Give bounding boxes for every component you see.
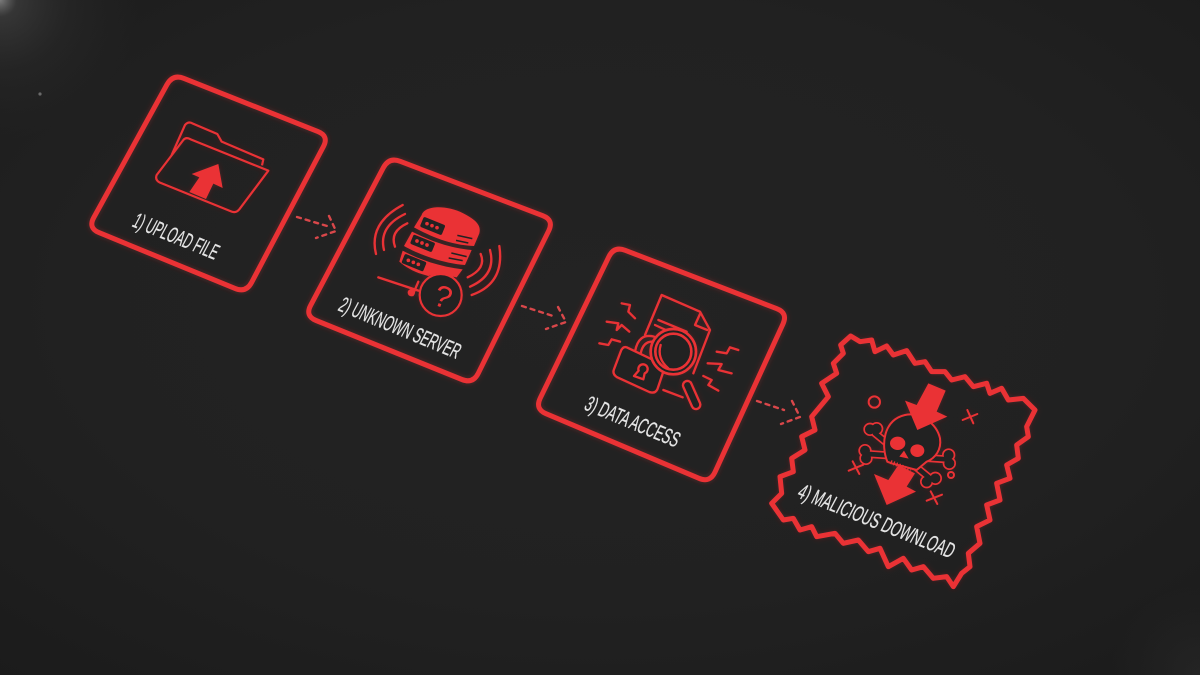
panel: step 3 data access [539,249,785,480]
icon: folder with upload arrow [156,122,268,212]
step 1 frame [92,77,325,290]
arrow: step 3 to step 4 [757,401,800,424]
icon: document, padlock and magnifier [599,295,738,410]
label: unknown server: 2) UNKNOWN SERVER [335,292,466,363]
panel: step 4 malicious download [772,336,1035,587]
icon: skull with crossbones and arrows [849,383,977,505]
icon: server with question mark: ? [429,278,457,316]
icon: server with question mark [375,205,500,316]
step 2 frame [309,160,550,381]
step 4 jagged frame [772,336,1035,587]
arrow: step 1 to step 2 [297,216,336,238]
label: malicious download: 4) MALICIOUS DOWNLOAD [794,479,960,563]
panel: step 1 upload file [92,77,325,290]
panel: step 2 unknown server [309,160,550,381]
arrow: step 2 to step 3 [522,306,566,329]
label: upload file: 1) UPLOAD FILE [129,208,224,264]
step 3 frame [539,249,785,480]
label: data access: 3) DATA ACCESS [581,391,685,452]
